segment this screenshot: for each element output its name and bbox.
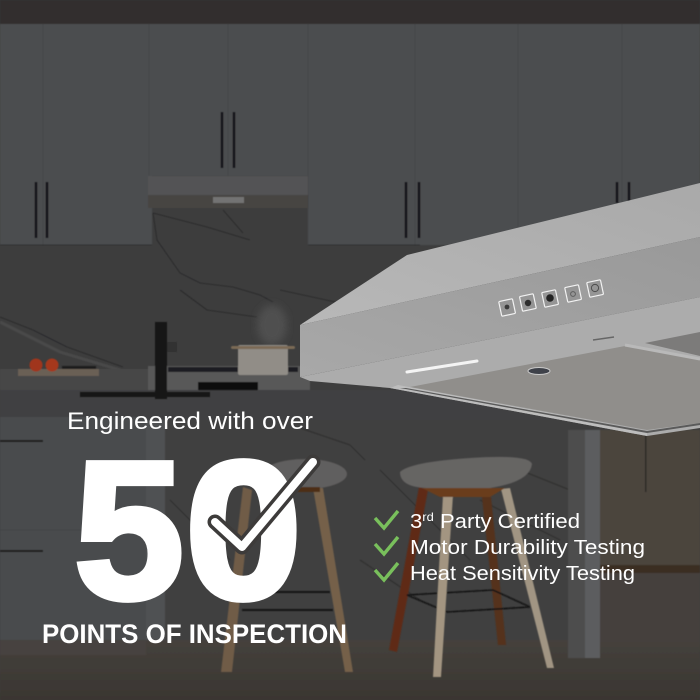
icon: green check 2 xyxy=(375,537,398,554)
feature: 3rd Party Certified: 3 xyxy=(410,510,421,533)
feature: 3rd Party Certified: rd xyxy=(422,510,434,524)
background range hood xyxy=(148,176,308,208)
icon: large check mark xyxy=(215,462,313,547)
feature: Heat Sensitivity Testing: Heat Sensitivity Testing xyxy=(410,562,635,585)
feature: 3rd Party Certified: Party Certified xyxy=(434,510,580,533)
stool right xyxy=(389,457,554,677)
light fixture xyxy=(528,368,550,374)
big number 50 xyxy=(74,421,302,640)
hood top face xyxy=(300,183,700,325)
icon: green check 1 xyxy=(375,511,398,528)
second grease filter xyxy=(645,332,700,356)
hood front panel xyxy=(300,237,700,377)
icon: green check 3 xyxy=(375,563,398,580)
button glyphs xyxy=(505,284,599,309)
countertop items: cutting board, tomatoes, pot, faucet, range xyxy=(18,305,310,399)
feature: Motor Durability Testing: Motor Durability Testing xyxy=(410,536,645,559)
subheading: Points of Inspection: POINTS OF INSPECTION xyxy=(42,619,347,649)
big number 50: 0 xyxy=(185,421,302,640)
big number 50: 5 xyxy=(74,421,184,640)
stool left xyxy=(221,459,353,672)
brand label xyxy=(593,337,614,340)
hood underside xyxy=(300,297,700,436)
LED light bar xyxy=(407,361,477,372)
control buttons xyxy=(499,280,604,316)
headline: Engineered with over: Engineered with over xyxy=(67,408,313,435)
product range hood xyxy=(300,183,700,436)
feature list xyxy=(375,510,645,585)
